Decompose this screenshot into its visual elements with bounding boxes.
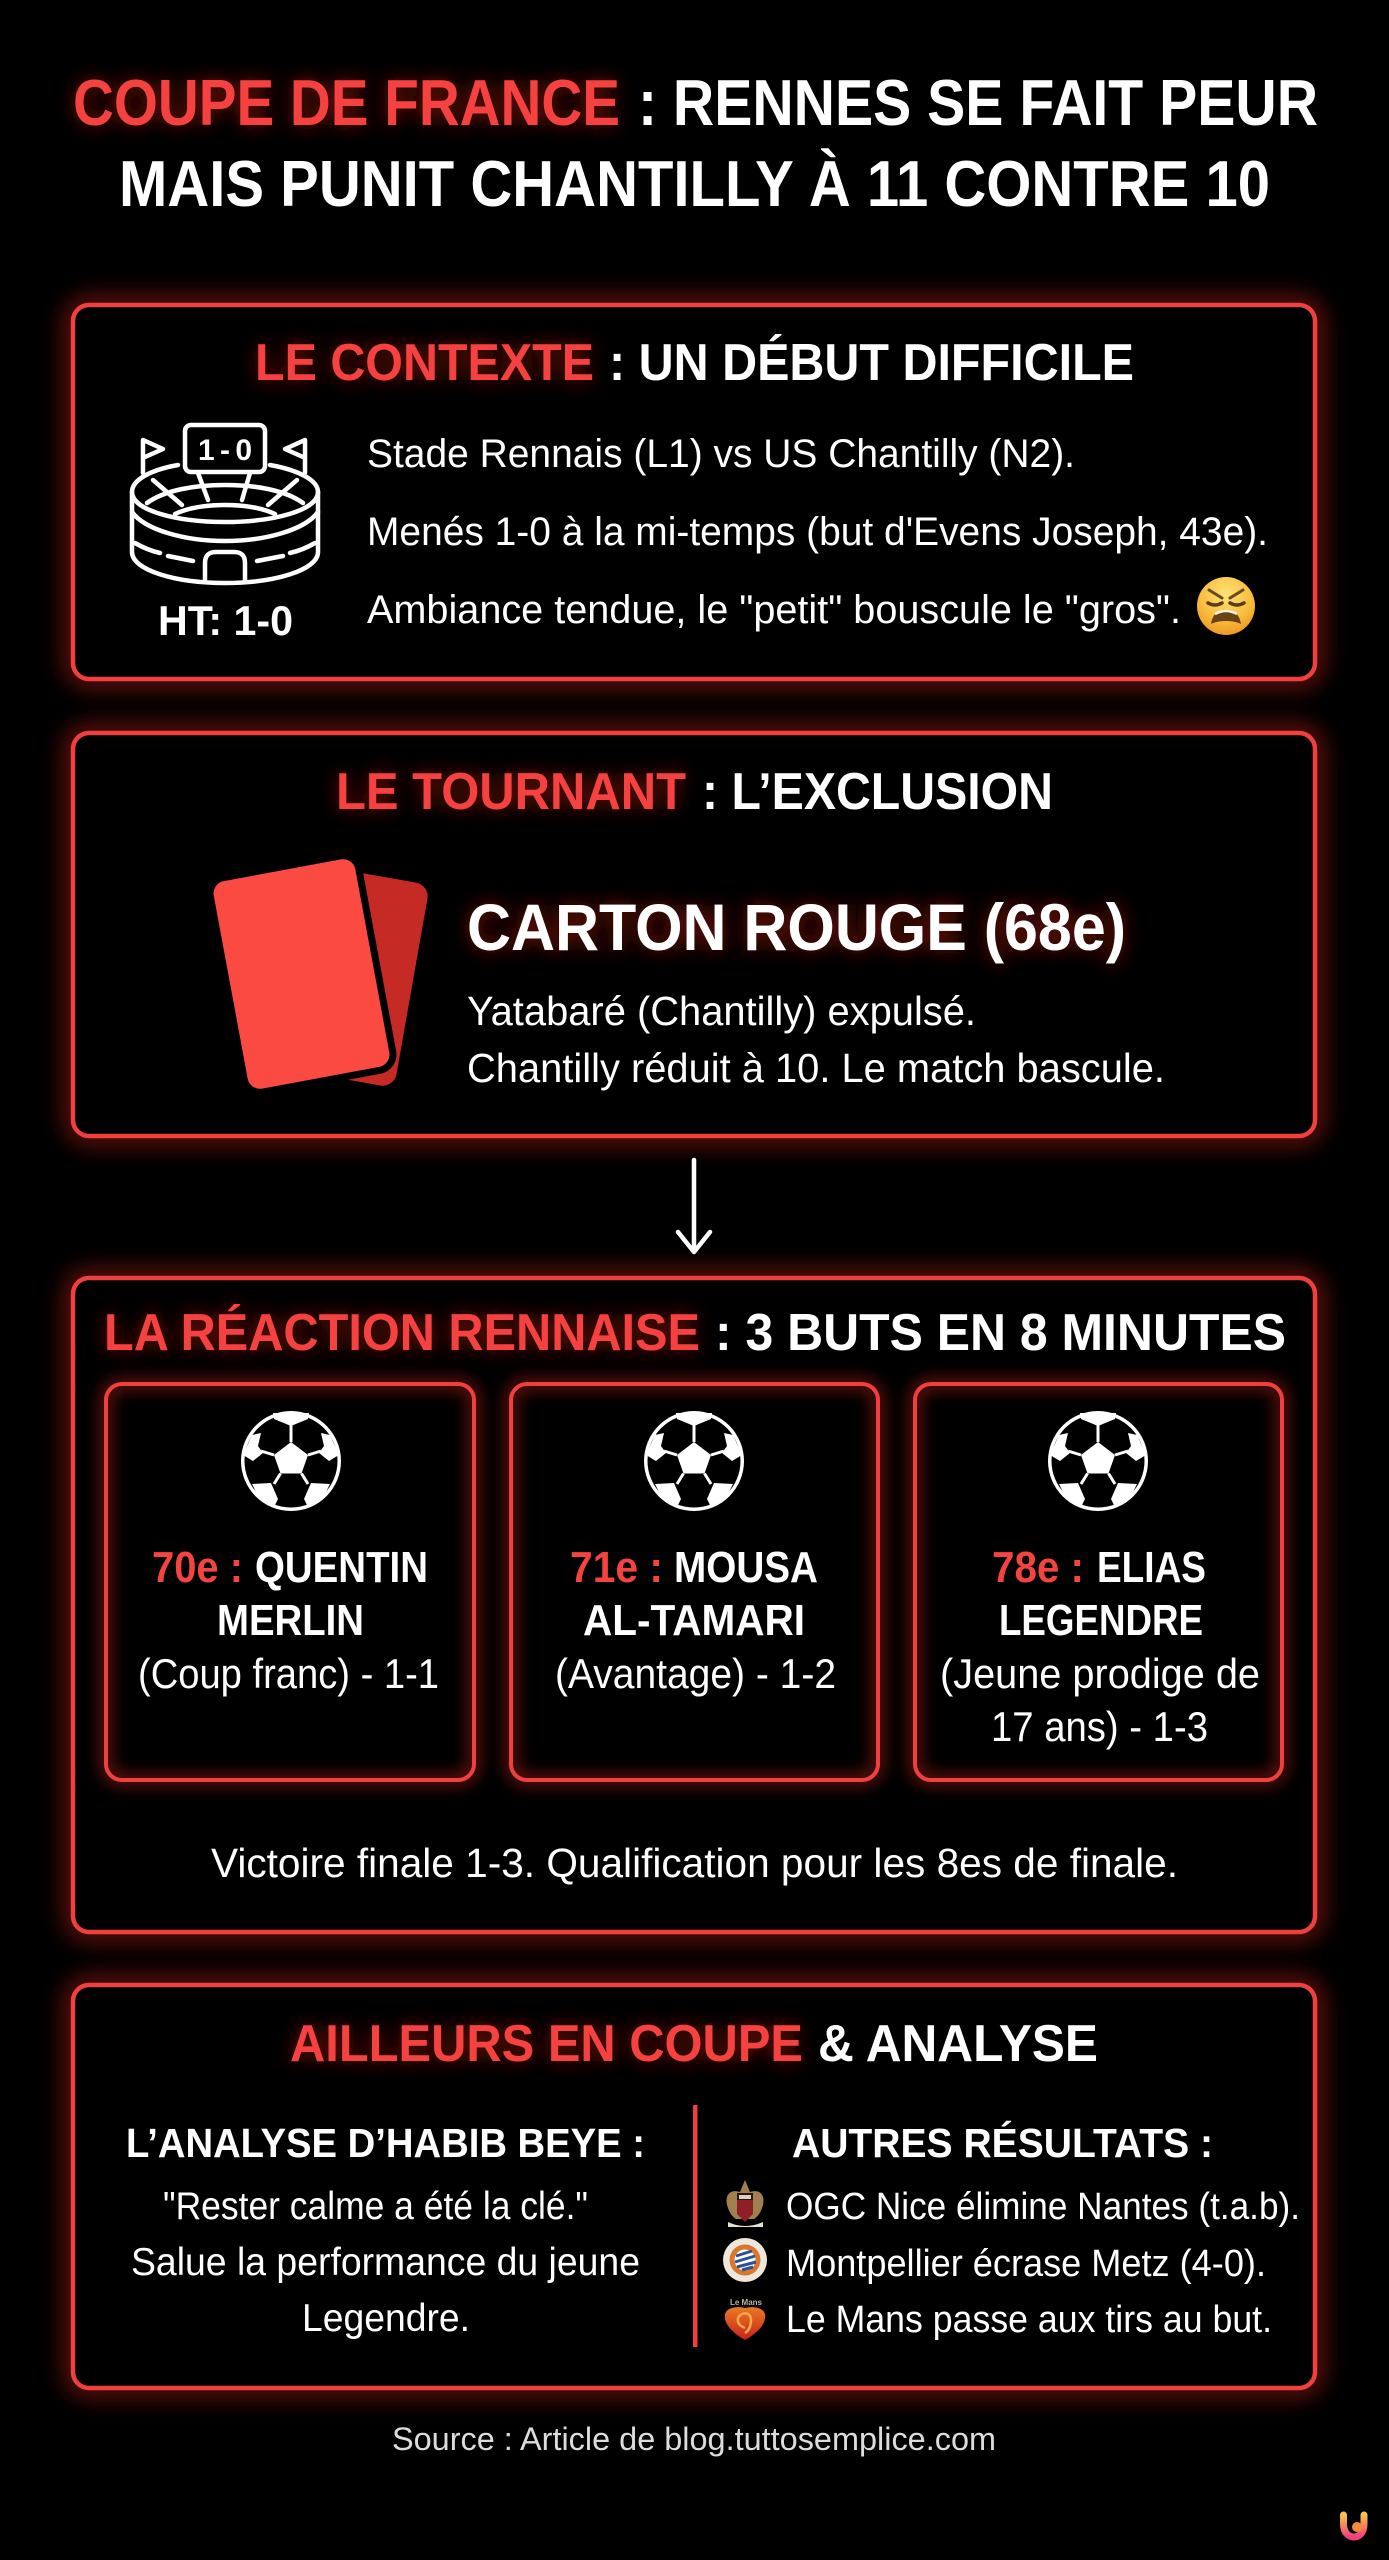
text block: analyse de Habib Beye: Legendre. [302, 2297, 470, 2340]
heading: ailleurs: & ANALYSE [818, 2015, 1098, 2073]
icon: tired face emoji [1197, 577, 1255, 635]
icon: Le Mans crest: Le Mans [730, 2298, 763, 2307]
text: final result: Victoire finale 1-3. Qualification pour les 8es de finale. [211, 1840, 1178, 1886]
title: MAIS PUNIT CHANTILLY À 11 CONTRE 10 [119, 147, 1270, 220]
source line: Source : Article de blog.tuttosemplice.com [392, 2421, 996, 2457]
text block: context lines: Ambiance tendue, le "petit" bouscule le "gros". [367, 588, 1181, 632]
goal text: 17 ans) - 1-3 [991, 1703, 1208, 1750]
heading: le contexte: : UN DÉBUT DIFFICILE [609, 334, 1134, 392]
icon: red cards [207, 853, 430, 1095]
panel: la réaction rennaise [73, 1278, 1315, 1932]
heading: ailleurs [290, 2015, 1098, 2073]
text block: autres résultats: AUTRES RÉSULTATS : [792, 2120, 1213, 2166]
text block: expulsion: Yatabaré (Chantilly) expulsé. [467, 988, 976, 1034]
text block: context lines: Menés 1-0 à la mi-temps (but d'Evens Joseph, 43e). [367, 510, 1268, 554]
goal text: QUENTIN [255, 1543, 428, 1592]
card: goal 71e [511, 1384, 878, 1780]
heading: la réaction: : 3 BUTS EN 8 MINUTES [715, 1304, 1286, 1362]
icon: Montpellier crest [723, 2238, 767, 2282]
title [73, 66, 1318, 220]
goal text: AL-TAMARI [583, 1596, 805, 1645]
text block: expulsion: Chantilly réduit à 10. Le match bascule. [467, 1045, 1165, 1091]
heading: la réaction: LA RÉACTION RENNAISE [104, 1304, 700, 1362]
goal text: LEGENDRE [999, 1596, 1203, 1645]
text block: autres résultats: OGC Nice élimine Nantes (t.a.b). [786, 2186, 1300, 2228]
icon: stadium with scoreboard: 1-0 [198, 434, 252, 467]
heading: le tournant [336, 763, 1053, 821]
icon: Nice crest [726, 2180, 764, 2227]
text block: context lines [367, 432, 1268, 632]
label: HT score: HT: 1-0 [158, 597, 293, 644]
goal text: (Jeune prodige de [940, 1650, 1260, 1697]
goal text: ELIAS [1097, 1543, 1206, 1592]
goal text: 78e : [992, 1543, 1084, 1592]
arrow: down [678, 1160, 710, 1252]
title: COUPE DE FRANCE [73, 66, 620, 139]
goal text: 70e : [152, 1543, 243, 1592]
callout: carton rouge: CARTON ROUGE (68e) [467, 890, 1126, 964]
heading: le tournant: LE TOURNANT [336, 763, 686, 821]
goal text: (Coup franc) - 1-1 [138, 1650, 439, 1697]
heading: la réaction [104, 1304, 1286, 1362]
heading: le contexte [255, 334, 1134, 392]
divider [693, 2105, 698, 2347]
icon: stadium with scoreboard [132, 425, 318, 583]
icon: brand logo [1344, 2515, 1364, 2537]
text block: autres résultats [723, 2120, 1300, 2341]
goal text [940, 1543, 1260, 1750]
icon: football [241, 1411, 341, 1511]
icon: football [1048, 1411, 1148, 1511]
text block: analyse de Habib Beye: "Rester calme a été la clé." [163, 2185, 588, 2228]
card: goal 78e [915, 1384, 1282, 1780]
text block: autres résultats: Montpellier écrase Metz (4-0). [786, 2243, 1266, 2285]
text block: analyse de Habib Beye [126, 2120, 645, 2340]
text block: expulsion [467, 988, 1165, 1091]
text block: analyse de Habib Beye: Salue la performance du jeune [131, 2241, 640, 2284]
goal text: 71e : [570, 1543, 663, 1592]
goal text: MOUSA [674, 1543, 818, 1592]
panel: le contexte [73, 305, 1315, 679]
heading: ailleurs: AILLEURS EN COUPE [290, 2015, 803, 2073]
text block: analyse de Habib Beye: L’ANALYSE D’HABIB BEYE : [126, 2120, 645, 2166]
panel: le tournant [73, 733, 1315, 1136]
goal text: MERLIN [217, 1596, 364, 1645]
heading: le tournant: : L’EXCLUSION [702, 763, 1053, 821]
goal text: (Avantage) - 1-2 [555, 1650, 836, 1697]
text block: context lines: Stade Rennais (L1) vs US Chantilly (N2). [367, 432, 1075, 476]
icon: Le Mans crest [725, 2298, 765, 2340]
text block: autres résultats: Le Mans passe aux tirs au but. [786, 2299, 1272, 2341]
heading: le contexte: LE CONTEXTE [255, 334, 594, 392]
panel: ailleurs en coupe [73, 1985, 1315, 2388]
goal text [555, 1543, 836, 1697]
goal text [138, 1543, 439, 1697]
card: goal 70e [106, 1384, 474, 1780]
icon: football [644, 1411, 744, 1511]
title: : RENNES SE FAIT PEUR [638, 66, 1318, 139]
